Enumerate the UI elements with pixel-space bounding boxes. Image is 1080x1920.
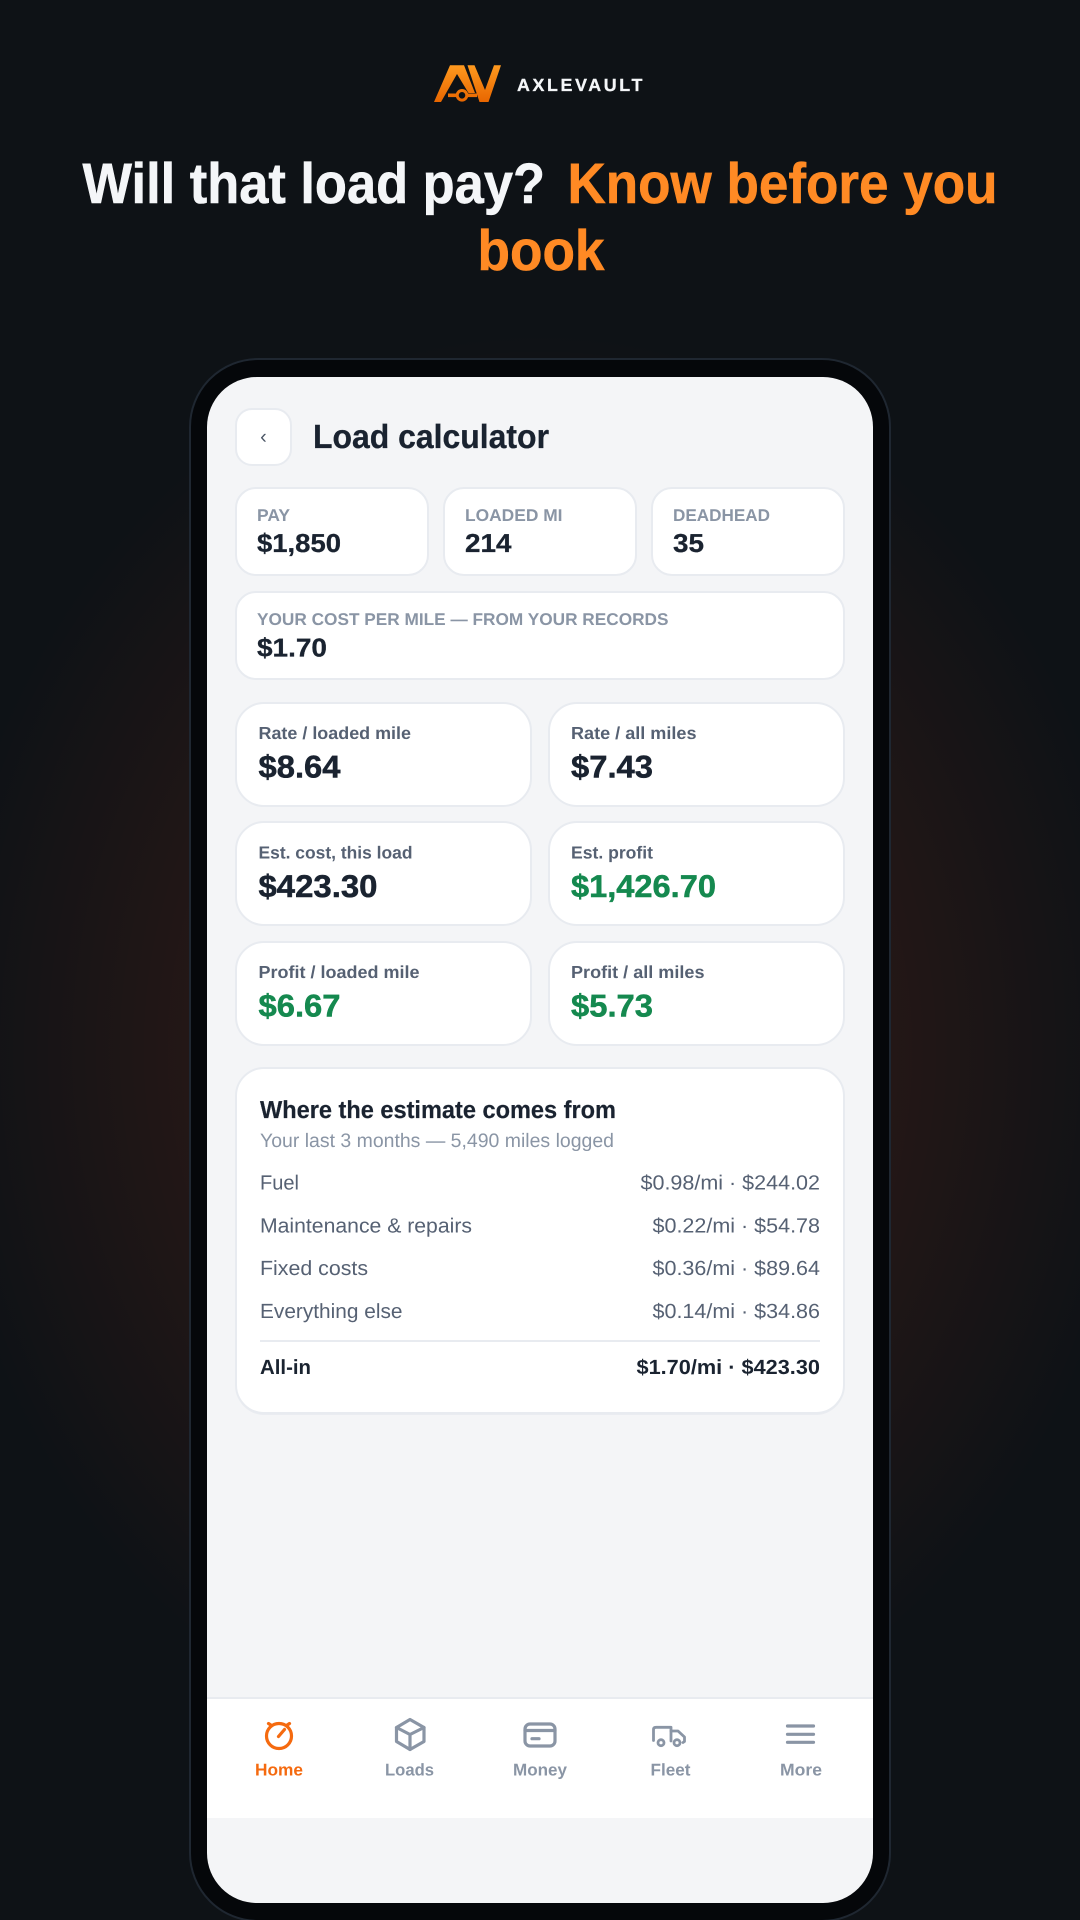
back button [236,409,291,465]
nav item: more [780,1726,822,1780]
icon: AV axle mark [434,65,501,102]
row: all-in total: All-in [260,1356,311,1379]
nav item: home [255,1724,303,1780]
icon: stopwatch [266,1724,292,1748]
row: maintenance and repairs: Maintenance & repairs [260,1214,472,1238]
input: loaded miles: 214 [465,528,512,558]
nav item: more: More [780,1760,822,1780]
bottom navigation [207,1697,873,1818]
nav item: home: Home [255,1760,303,1780]
metric: estimated cost: Est. cost, this load [258,842,412,862]
icon: menu [788,1726,814,1742]
metric: profit per all miles: $5.73 [571,988,653,1024]
row: everything else [260,1300,820,1323]
metric: profit per all miles [549,942,844,1045]
row: maintenance and repairs [260,1214,820,1238]
metric: profit per loaded mile: $6.67 [258,988,340,1024]
panel: where the estimate comes from [236,1068,844,1415]
input: pay [236,488,428,575]
metric: estimated cost: $423.30 [258,868,378,904]
icon: box [396,1720,424,1750]
row: all-in total: $1.70/mi · $423.30 [636,1356,820,1379]
row: fixed costs: $0.36/mi · $89.64 [652,1257,820,1280]
phone bezel [190,359,890,1920]
row: everything else: Everything else [260,1300,402,1323]
icon: truck [654,1727,684,1746]
metric: estimated profit: $1,426.70 [571,868,716,904]
metric: profit per loaded mile [236,942,531,1045]
input: pay: $1,850 [257,528,341,558]
input: deadhead [652,488,844,575]
panel heading: Where the estimate comes from [260,1097,616,1124]
nav item: fleet: Fleet [650,1760,691,1780]
nav item: loads [385,1720,434,1780]
row: fuel: $0.98/mi · $244.02 [640,1172,820,1194]
title: Know before you [568,152,998,216]
nav item: money [513,1724,568,1780]
brand logo [434,65,645,102]
row: fuel: Fuel [260,1172,299,1194]
metric: estimated profit [549,822,844,925]
metric: rate per all miles: Rate / all miles [571,723,697,743]
metric: profit per loaded mile: Profit / loaded mile [258,962,420,982]
input: deadhead: DEADHEAD [673,506,770,525]
icon: card [525,1724,555,1746]
row: fixed costs: Fixed costs [260,1257,368,1280]
metric: estimated profit: Est. profit [571,842,653,862]
metric: rate per all miles [549,703,844,806]
title [82,152,998,283]
phone mockup [190,359,890,1920]
row: everything else: $0.14/mi · $34.86 [652,1300,820,1323]
input: pay: PAY [257,506,291,525]
input: cost per mile: YOUR COST PER MILE — FROM YOUR RECORDS [257,610,668,629]
input: cost per mile: $1.70 [257,632,327,662]
title: Will that load pay? [82,152,545,216]
brand name: AXLEVAULT [517,75,645,95]
metric: rate per loaded mile: Rate / loaded mile [258,723,411,743]
metric: profit per all miles: Profit / all miles [571,962,705,982]
screen title: Load calculator [313,419,549,456]
row: maintenance and repairs: $0.22/mi · $54.78 [652,1214,820,1238]
phone screen [207,377,873,1903]
input: deadhead: 35 [673,528,704,558]
panel subtitle: Your last 3 months — 5,490 miles logged [260,1130,614,1152]
row: fuel [260,1172,820,1194]
row: all-in total [260,1356,820,1379]
input: loaded miles [444,488,636,575]
title: book [478,219,605,283]
metric: rate per all miles: $7.43 [571,748,653,784]
back button: ‹ [260,426,267,448]
nav item: money: Money [513,1760,568,1780]
input: cost per mile [236,592,844,679]
screen header [236,409,549,465]
metric: estimated cost [236,822,531,925]
nav item: loads: Loads [385,1760,434,1780]
nav item: fleet [650,1727,691,1780]
row: fixed costs [260,1257,820,1280]
input: loaded miles: LOADED MI [465,506,562,525]
metric: rate per loaded mile [236,703,531,806]
metric: rate per loaded mile: $8.64 [258,748,341,784]
